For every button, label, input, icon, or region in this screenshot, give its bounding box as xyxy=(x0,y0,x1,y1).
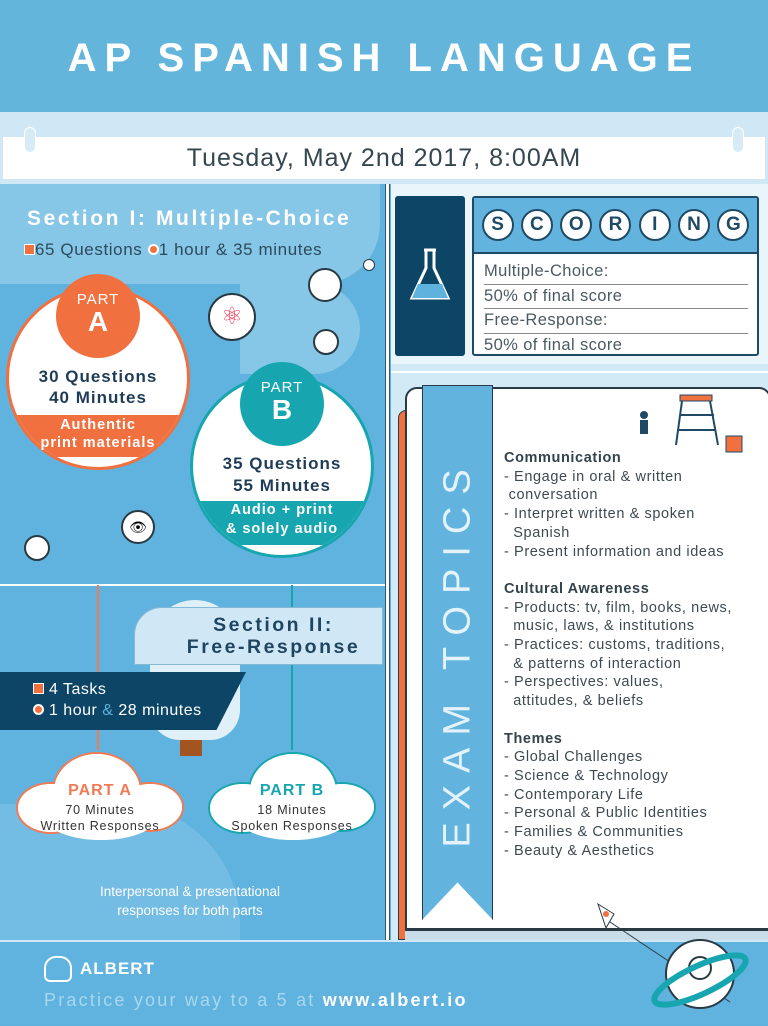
section II heading box: Section II: xyxy=(213,614,334,636)
topics text: - Practices: customs, traditions, xyxy=(504,637,725,653)
topics text: music, laws, & institutions xyxy=(513,618,695,634)
cloud A text: PART A xyxy=(68,782,132,799)
section II heading box xyxy=(134,607,383,665)
scoring header: C xyxy=(530,214,544,235)
part B badge xyxy=(240,362,324,446)
balloon xyxy=(150,600,240,740)
topics text: Spanish xyxy=(513,525,570,541)
part B text xyxy=(223,454,341,495)
topics text: - Personal & Public Identities xyxy=(504,805,707,821)
cloud part A: 70 Minutes xyxy=(65,803,135,817)
section I details: 65 Questions 1 hour & 35 minutes xyxy=(35,240,322,259)
topics text: Communication xyxy=(504,450,621,466)
cloud part B xyxy=(208,752,376,840)
icon: ladder xyxy=(640,394,742,452)
dotted string right xyxy=(391,371,768,373)
part B circle: Audio + print xyxy=(231,502,333,518)
scoring header: O xyxy=(569,214,584,235)
strings xyxy=(97,585,99,750)
cloud part A xyxy=(16,752,184,840)
part A text xyxy=(39,367,157,407)
scoring header: N xyxy=(687,214,701,235)
part A circle: print materials xyxy=(41,435,155,451)
cloud part B: Spoken Responses xyxy=(231,819,353,833)
header band xyxy=(0,0,768,112)
logo xyxy=(44,956,72,982)
topics text: - Families & Communities xyxy=(504,824,684,840)
part A text: 40 Minutes xyxy=(49,388,147,407)
section II details band xyxy=(0,672,246,730)
part A text: 30 Questions xyxy=(39,367,157,386)
topics text: attitudes, & beliefs xyxy=(513,693,644,709)
part B badge: B xyxy=(272,394,292,425)
scoring text: 50% of final score xyxy=(484,286,622,304)
part A badge xyxy=(56,274,140,358)
note: Interpersonal & presentational xyxy=(100,884,280,899)
section II heading box: Free-Response xyxy=(187,636,360,658)
ribbon: exam topics: EXAM TOPICS xyxy=(436,457,478,848)
section II details band: 4 Tasks xyxy=(49,681,106,698)
topics text: - Interpret written & spoken xyxy=(504,506,695,522)
right panel xyxy=(391,184,768,940)
scoring text: Multiple-Choice: xyxy=(484,262,609,280)
part A circle: Authentic xyxy=(60,417,136,433)
scoring text: Free-Response: xyxy=(484,311,608,329)
icons: small circles: 👁 xyxy=(129,519,147,535)
cloud part A: Written Responses xyxy=(40,819,159,833)
note: responses for both parts xyxy=(117,903,263,918)
scoring header: G xyxy=(726,214,741,235)
flask panel xyxy=(395,196,465,356)
scoring text xyxy=(484,262,748,354)
cloud B text: PART B xyxy=(260,782,324,799)
title: AP SPANISH LANGUAGE xyxy=(68,36,700,80)
scoring header: S xyxy=(491,214,504,235)
topics text: - Present information and ideas xyxy=(504,544,724,560)
topics text: - Perspectives: values, xyxy=(504,674,664,690)
date strip xyxy=(0,112,768,184)
part B circle: & solely audio xyxy=(226,521,338,537)
topics text: - Science & Technology xyxy=(504,768,668,784)
topics text: - Products: tv, film, books, news, xyxy=(504,600,732,616)
topics text: - Engage in oral & written xyxy=(504,469,682,485)
scoring header: I xyxy=(652,214,657,235)
scoring box xyxy=(472,196,759,356)
section II details band: 1 hour & 28 minutes xyxy=(49,702,202,719)
icon: planet xyxy=(597,903,749,1009)
cloud part B: 18 Minutes xyxy=(257,803,327,817)
tagline: Practice your way to a 5 at www.albert.io xyxy=(44,990,468,1010)
topics text: & patterns of interaction xyxy=(513,656,681,672)
scoring header xyxy=(474,198,757,254)
topics text: Cultural Awareness xyxy=(504,581,649,597)
part B text: 55 Minutes xyxy=(233,476,331,495)
icons: small circles xyxy=(24,259,375,561)
scoring text: 50% of final score xyxy=(484,336,622,354)
section I heading: Section I: Multiple-Choice xyxy=(27,207,351,230)
part B badge: PART xyxy=(261,379,303,396)
part A circle xyxy=(6,274,190,470)
dotted string left xyxy=(0,584,385,586)
topics text: - Global Challenges xyxy=(504,749,643,765)
note xyxy=(100,884,280,918)
footer: ALBERT xyxy=(80,959,155,978)
icon: flask xyxy=(410,248,450,300)
topics text: conversation xyxy=(509,487,598,503)
part A badge: PART xyxy=(77,291,119,308)
left panel xyxy=(0,184,386,940)
divider xyxy=(385,184,390,940)
footer xyxy=(0,940,768,1024)
date bar xyxy=(3,137,765,179)
scoring header: R xyxy=(609,214,622,235)
ribbon: exam topics xyxy=(422,385,493,920)
date bar: Tuesday, May 2nd 2017, 8:00AM xyxy=(187,144,581,172)
part B circle xyxy=(190,362,374,558)
part B text: 35 Questions xyxy=(223,454,341,473)
icons: small circles: ⚛ xyxy=(221,303,243,330)
topics text: - Beauty & Aesthetics xyxy=(504,843,654,859)
topics text xyxy=(504,450,732,859)
topics text: Themes xyxy=(504,731,562,747)
topics text: - Contemporary Life xyxy=(504,787,644,803)
part A badge: A xyxy=(88,306,108,337)
book xyxy=(398,410,410,940)
